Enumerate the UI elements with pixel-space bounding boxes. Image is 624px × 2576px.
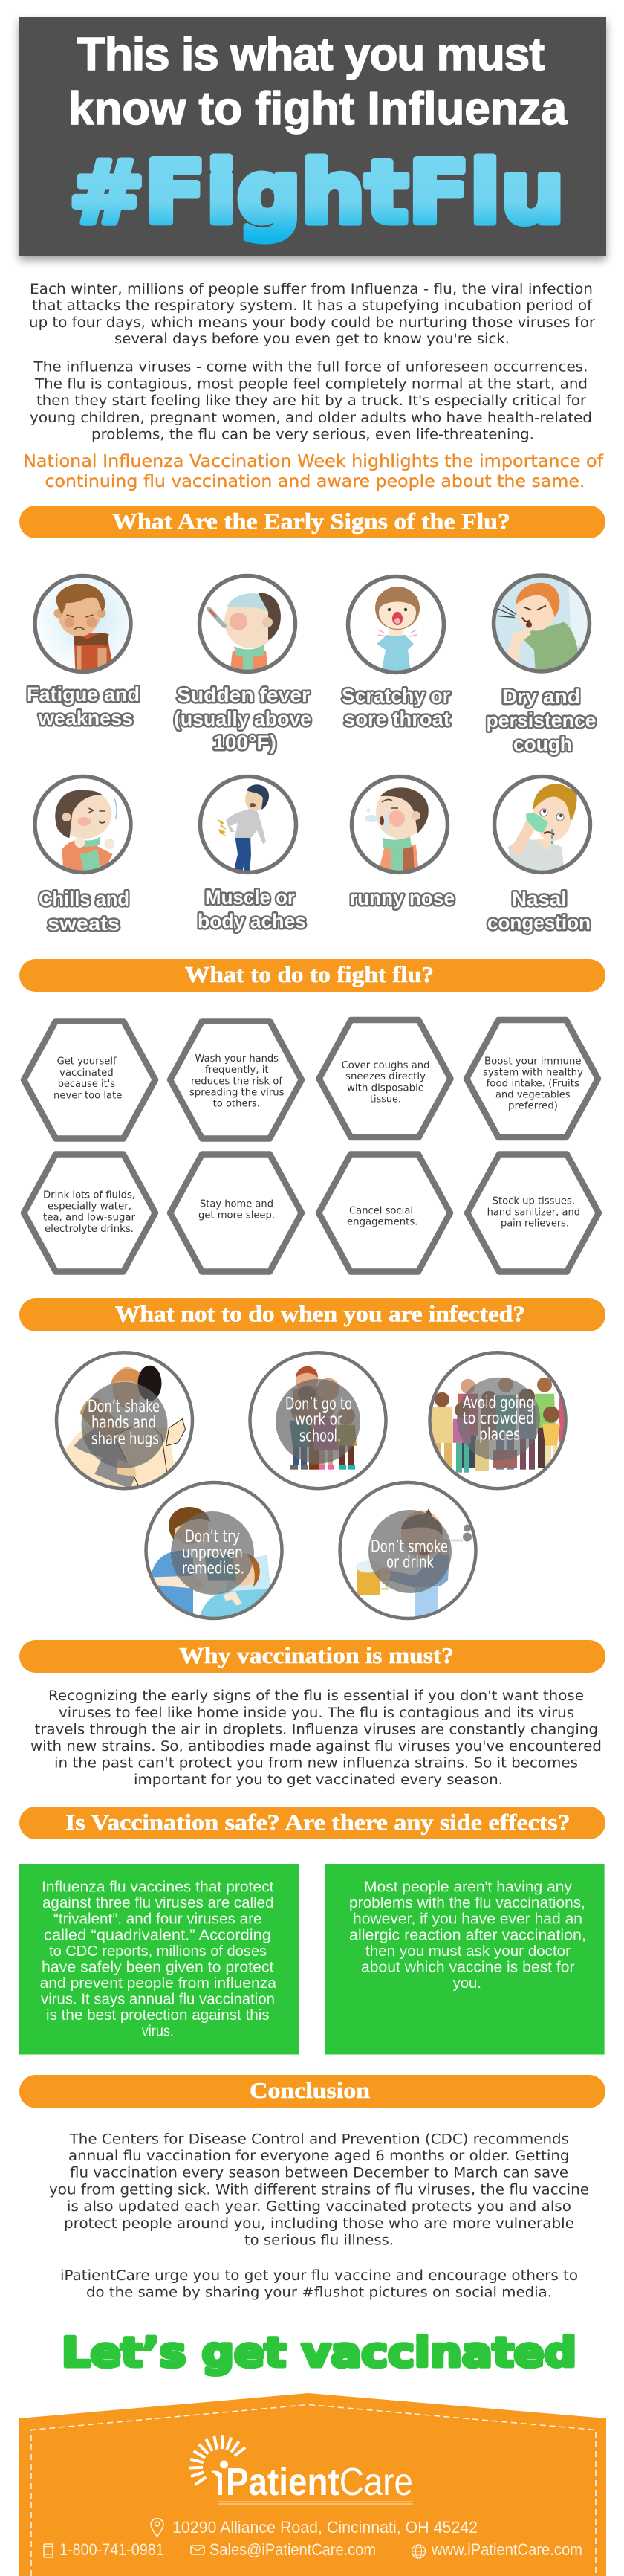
panel: vaccine types: called “quadrivalent.” According bbox=[44, 1927, 271, 1943]
footer panel bbox=[19, 2393, 606, 2576]
label: sore throat bbox=[344, 708, 450, 730]
hexagon: wash hands bbox=[170, 1021, 302, 1139]
don't: smoke or drink bbox=[340, 1482, 475, 1619]
translucent label disc bbox=[368, 1510, 452, 1593]
translucent label disc bbox=[82, 1382, 168, 1468]
hexagon: wash hands: reduces the risk of bbox=[191, 1075, 283, 1087]
hexagon: stock up: hand sanitizer, and bbox=[487, 1206, 580, 1218]
label bbox=[174, 684, 311, 754]
hexagon: get vaccinated: Get yourself bbox=[57, 1056, 117, 1068]
heading: why vaccination: Why vaccination is must? bbox=[179, 1642, 454, 1668]
illustration: two people hugging bbox=[65, 1366, 186, 1495]
address: 10290 Alliance Road, Cincinnati, OH 45242 bbox=[172, 2518, 478, 2537]
conclusion paragraph 2 bbox=[60, 2268, 578, 2301]
label: Sudden fever bbox=[177, 684, 311, 706]
conclusion paragraph 1: The Centers for Disease Control and Prevention (CDC) recommends bbox=[69, 2132, 569, 2147]
panel: vaccine types: “trivalent”, and four viruses are bbox=[53, 1911, 261, 1928]
title line 2: know to fight Influenza bbox=[68, 83, 568, 135]
hexagon: cover coughs: with disposable bbox=[347, 1082, 424, 1094]
label: cough bbox=[513, 733, 572, 755]
intro paragraph 1: several days before you even get to know you're sick. bbox=[114, 332, 510, 347]
hexagon: cancel social: engagements. bbox=[347, 1216, 417, 1227]
label: sweats bbox=[48, 912, 120, 934]
sign: muscle aches bbox=[198, 784, 306, 932]
translucent label disc: Don’t smoke bbox=[371, 1538, 448, 1557]
hexagon: cover coughs: tissue. bbox=[370, 1093, 401, 1105]
heading: conclusion: Conclusion bbox=[250, 2077, 370, 2103]
why vaccination text: with new strains. So, antibodies made against flu viruses you've encountered bbox=[30, 1739, 602, 1755]
translucent label disc: Don’t shake bbox=[88, 1398, 160, 1416]
hexagon: drink fluids: Drink lots of fluids, bbox=[43, 1189, 135, 1201]
conclusion paragraph 2: do the same by sharing your #flushot pictures on social media. bbox=[86, 2285, 552, 2301]
intro paragraph 2: The flu is contagious, most people feel completely normal at the start, and bbox=[34, 376, 588, 393]
hexagon: stay home bbox=[170, 1154, 302, 1271]
panel: vaccine types: is the best protection against this bbox=[46, 2007, 270, 2024]
label: congestion bbox=[487, 911, 591, 934]
sign: sudden fever bbox=[174, 593, 311, 754]
label bbox=[198, 886, 306, 932]
label: persistence bbox=[486, 709, 596, 732]
icon: man with tissue bbox=[508, 784, 577, 874]
hashtag: #FightFlu bbox=[69, 143, 565, 243]
hexagon: stock up: pain relievers. bbox=[501, 1218, 569, 1230]
panel: vaccine types bbox=[19, 1864, 299, 2055]
hexagon: get vaccinated: never too late bbox=[53, 1089, 122, 1101]
conclusion paragraph 1 bbox=[49, 2132, 589, 2248]
hexagon: boost immune system: and vegetables bbox=[495, 1089, 571, 1101]
hexagon: boost immune system: system with healthy bbox=[483, 1066, 583, 1078]
panel: side effects: however, if you have ever had an bbox=[353, 1911, 582, 1928]
label: runny nose bbox=[350, 887, 455, 909]
heading: what not to do bbox=[19, 1298, 605, 1331]
why vaccination text: important for you to get vaccinated every season. bbox=[134, 1772, 503, 1788]
intro paragraph 2: young children, pregnant women, and older adults who have health-related bbox=[30, 410, 592, 426]
panel: side effects: then you must ask your doctor bbox=[365, 1943, 571, 1960]
panel: side effects: you. bbox=[453, 1975, 481, 1992]
intro paragraph 1: Each winter, millions of people suffer from Influenza - flu, the viral infection bbox=[30, 282, 593, 297]
panel: vaccine types: Influenza flu vaccines that protect bbox=[42, 1878, 274, 1895]
orange highlight text bbox=[23, 452, 604, 491]
illustration: family bbox=[290, 1366, 357, 1470]
illustration: man with cigarette and beer bbox=[356, 1509, 472, 1619]
heading: what not to do: What not to do when you are infected? bbox=[115, 1301, 525, 1326]
label: weakness bbox=[38, 707, 133, 729]
hexagon: drink fluids: tea, and low-sugar bbox=[43, 1212, 135, 1224]
label bbox=[39, 888, 129, 934]
email: Sales@iPatientCare.com bbox=[209, 2540, 376, 2559]
intro paragraph 2: problems, the flu can be very serious, even life-threatening. bbox=[91, 427, 534, 443]
conclusion paragraph 1: you from getting sick. With different strains of flu viruses, the flu vaccine bbox=[49, 2182, 589, 2198]
label bbox=[486, 685, 596, 755]
hexagon: cover coughs: sneezes directly bbox=[345, 1071, 426, 1082]
translucent label disc bbox=[276, 1379, 360, 1464]
why vaccination text: Recognizing the early signs of the flu is essential if you don't want those bbox=[48, 1688, 584, 1704]
translucent label disc: school. bbox=[299, 1427, 341, 1445]
translucent label disc bbox=[171, 1511, 254, 1595]
panel: side effects: Most people aren't having any bbox=[364, 1878, 573, 1895]
translucent label disc: Avoid going bbox=[463, 1394, 534, 1413]
orange highlight text: continuing flu vaccination and aware people about the same. bbox=[45, 472, 585, 491]
heading: is vaccination safe bbox=[19, 1807, 605, 1839]
icon: tired boy bbox=[40, 578, 129, 670]
hexagon: cancel social: Cancel social bbox=[349, 1204, 413, 1216]
translucent label disc: unproven bbox=[182, 1544, 243, 1563]
sign: nasal congestion bbox=[487, 784, 591, 934]
intro paragraph 2 bbox=[30, 360, 592, 443]
orange highlight text: National Influenza Vaccination Week highlights the importance of bbox=[23, 452, 604, 471]
don't: shake hands bbox=[56, 1352, 192, 1495]
heading: is vaccination safe: Is Vaccination safe? Are there any side effects? bbox=[65, 1810, 571, 1835]
don't: unproven remedies bbox=[146, 1482, 282, 1619]
hexagon: cancel social bbox=[319, 1154, 450, 1271]
hexagon: stay home: get more sleep. bbox=[198, 1209, 275, 1221]
why vaccination text bbox=[30, 1688, 602, 1788]
label: Muscle or bbox=[205, 886, 295, 908]
hexagon: wash hands: to others. bbox=[213, 1098, 260, 1110]
hexagon: wash hands: spreading the virus bbox=[189, 1086, 284, 1098]
label: (usually above bbox=[174, 708, 311, 730]
hexagon: get vaccinated: because it's bbox=[58, 1078, 115, 1090]
heading: early signs: What Are the Early Signs of the Flu? bbox=[112, 509, 510, 534]
conclusion paragraph 1: annual flu vaccination for everyone aged 6 months or older. Getting bbox=[68, 2149, 569, 2164]
hexagon: boost immune system: Boost your immune bbox=[484, 1055, 582, 1067]
panel: side effects: about which vaccine is best for bbox=[361, 1958, 575, 1975]
heading: early signs bbox=[19, 506, 605, 538]
intro paragraph 1: that attacks the respiratory system. It has a stupefying incubation period of bbox=[32, 298, 593, 314]
translucent label disc: or drink bbox=[386, 1553, 434, 1572]
sign: chills and sweats bbox=[39, 790, 129, 934]
don't: crowded places bbox=[429, 1352, 569, 1488]
logo: PatientCare bbox=[226, 2461, 413, 2504]
title line 1: This is what you must bbox=[77, 29, 545, 80]
conclusion paragraph 1: to serious flu illness. bbox=[244, 2233, 394, 2248]
illustration: crowd bbox=[431, 1378, 569, 1476]
panel: vaccine types: have safely been given to protect bbox=[42, 1958, 274, 1975]
title banner bbox=[19, 17, 606, 260]
translucent label disc: Don’t go to bbox=[285, 1395, 352, 1414]
translucent label disc: share hugs bbox=[91, 1430, 159, 1448]
panel: vaccine types: against three flu viruses are called bbox=[42, 1894, 273, 1911]
hexagon: boost immune system: preferred) bbox=[508, 1100, 558, 1112]
heading: what to do: What to do to fight flu? bbox=[185, 961, 434, 987]
hexagon: wash hands: frequently, it bbox=[205, 1064, 269, 1076]
phone: 1-800-741-0981 bbox=[59, 2540, 164, 2559]
panel: side effects: problems with the flu vaccinations, bbox=[349, 1894, 585, 1911]
conclusion paragraph 1: flu vaccination every season between December to March can save bbox=[70, 2165, 568, 2181]
translucent label disc: Don’t try bbox=[185, 1528, 240, 1546]
translucent label disc bbox=[457, 1378, 540, 1461]
label bbox=[487, 888, 591, 934]
panel: vaccine types: and prevent people from influenza bbox=[40, 1975, 277, 1992]
heading: conclusion bbox=[19, 2075, 605, 2108]
label: Chills and bbox=[39, 888, 129, 910]
icon: man with runny nose bbox=[365, 787, 429, 874]
hexagon: get vaccinated bbox=[24, 1021, 155, 1139]
intro paragraph 2: The influenza viruses - come with the full force of unforeseen occurrences. bbox=[33, 360, 588, 375]
panel: vaccine types: virus. It says annual flu vaccination bbox=[41, 1991, 275, 2008]
translucent label disc: places bbox=[479, 1426, 520, 1444]
why vaccination text: travels through the air in droplets. Influenza viruses are constantly changing bbox=[35, 1722, 598, 1737]
don't: go to work bbox=[250, 1352, 386, 1488]
conclusion paragraph 1: protect people around you, including those who are more vulnerable bbox=[64, 2216, 574, 2232]
hexagon: get vaccinated: vaccinated bbox=[59, 1067, 114, 1079]
panel: side effects bbox=[325, 1864, 605, 2055]
label: Nasal bbox=[512, 888, 567, 910]
translucent label disc: remedies. bbox=[182, 1560, 244, 1578]
hexagon: cover coughs bbox=[319, 1020, 450, 1137]
conclusion paragraph 1: is also updated each year. Getting vaccinated protects you and also bbox=[67, 2199, 571, 2215]
hexagon: stock up bbox=[467, 1154, 599, 1271]
hexagon: drink fluids: electrolyte drinks. bbox=[45, 1223, 134, 1235]
translucent label disc: hands and bbox=[91, 1414, 156, 1433]
website: www.iPatientCare.com bbox=[431, 2540, 582, 2559]
panel: side effects: allergic reaction after vaccination, bbox=[349, 1927, 586, 1943]
hexagon: drink fluids bbox=[24, 1154, 155, 1271]
conclusion paragraph 2: iPatientCare urge you to get your flu vaccine and encourage others to bbox=[60, 2268, 578, 2284]
sign: fatigue and weakness bbox=[27, 576, 140, 729]
hexagon: boost immune system: food intake. (Fruits bbox=[487, 1077, 579, 1089]
sign: runny nose bbox=[350, 787, 455, 909]
heading: what to do bbox=[19, 959, 605, 992]
sign circle outlines bbox=[35, 575, 590, 873]
label: Scratchy or bbox=[342, 685, 450, 707]
label: Fatigue and bbox=[27, 683, 140, 706]
illustration: mother and child bbox=[152, 1507, 270, 1619]
icon: man with thermometer bbox=[209, 593, 281, 676]
label: 100°F) bbox=[213, 732, 276, 754]
heading: why vaccination bbox=[19, 1640, 605, 1673]
hexagon: stay home: Stay home and bbox=[200, 1198, 273, 1210]
icon: shivering man bbox=[55, 790, 117, 874]
hexagon: stock up: Stock up tissues, bbox=[493, 1195, 575, 1207]
hexagon: cover coughs: Cover coughs and bbox=[342, 1059, 429, 1071]
translucent label disc: to crowded bbox=[463, 1410, 534, 1428]
panel: vaccine types: to CDC reports, millions of doses bbox=[49, 1943, 267, 1960]
label bbox=[342, 685, 450, 730]
hexagon: drink fluids: especially water, bbox=[48, 1201, 131, 1213]
translucent label disc: work or bbox=[295, 1411, 343, 1430]
intro paragraph 2: then they start feeling like they are hit by a truck. It's especially critical for bbox=[36, 393, 586, 409]
call to action: Let’s get vaccinated bbox=[62, 2329, 576, 2376]
why vaccination text: viruses to feel like home inside you. The flu is contagious and its virus bbox=[59, 1705, 574, 1721]
panel: vaccine types: virus. bbox=[142, 2022, 174, 2039]
icon: kid with open mouth bbox=[375, 587, 420, 674]
sign: dry cough bbox=[486, 575, 596, 755]
label: body aches bbox=[198, 910, 306, 932]
icon: man coughing bbox=[495, 577, 588, 669]
why vaccination text: in the past can't protect you from new influenza strains. So it becomes bbox=[54, 1756, 578, 1772]
hexagon: wash hands: Wash your hands bbox=[195, 1053, 279, 1065]
label: Dry and bbox=[502, 685, 580, 708]
label bbox=[27, 683, 140, 729]
sign: scratchy throat bbox=[342, 587, 450, 730]
logo bbox=[189, 2435, 413, 2504]
icon: man holding back bbox=[217, 784, 269, 874]
intro paragraph 1: up to four days, which means your body could be nurturing those viruses for bbox=[29, 315, 595, 331]
hexagon: boost immune system bbox=[467, 1020, 598, 1137]
intro paragraph 1 bbox=[29, 282, 595, 347]
